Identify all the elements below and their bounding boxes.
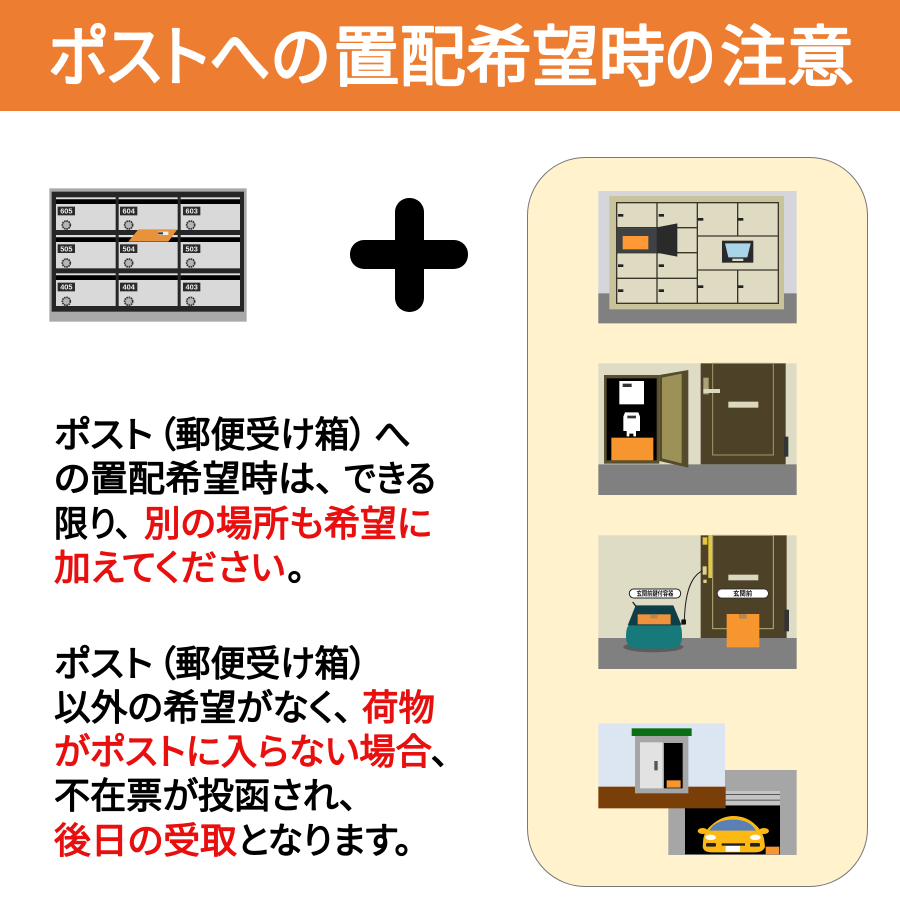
text block: no other location warning — [54, 643, 449, 861]
text block: no other location warning: となります。 — [237, 820, 412, 861]
text block: no other location warning: 後日の受取 — [54, 820, 237, 861]
icon: mailbox illustration: 503 — [186, 244, 198, 253]
text block: request other locations: 別の場所も希望に — [144, 503, 432, 544]
icon: plus sign — [350, 198, 468, 312]
icon: meter cabinet and garage — [598, 723, 797, 855]
panel: alternative delivery locations — [528, 158, 868, 886]
icon: mailbox illustration: 605 — [60, 207, 72, 216]
text block: no other location warning: 荷物 — [362, 687, 435, 728]
text block: request other locations: 。 — [287, 547, 305, 588]
text block: no other location warning: 、 — [431, 731, 449, 772]
text block: no other location warning: 不在票が投函され、 — [54, 775, 357, 816]
text block: request other locations: （郵便受け箱） — [158, 414, 367, 455]
label: door front tag — [717, 589, 768, 598]
label: door front tag: 玄関前 — [733, 589, 753, 598]
icon: mailbox illustration — [49, 188, 247, 322]
title: の — [665, 20, 715, 94]
icon: gas meter box at door — [598, 363, 797, 495]
text block: no other location warning: がポストに入らない場合 — [54, 731, 432, 772]
text block: request other locations: 加えてください — [54, 547, 285, 588]
title: 置配希望時 — [333, 20, 665, 94]
text block: request other locations: ポスト — [54, 414, 153, 455]
icon: mailbox illustration: 403 — [186, 283, 198, 292]
icon: delivery locker — [598, 191, 797, 323]
icon: mailbox illustration: 505 — [60, 244, 72, 253]
text block: no other location warning: （郵便受け箱） — [158, 643, 367, 684]
text block: request other locations: の置配希望時は、 — [54, 458, 334, 499]
text block: request other locations: できる — [344, 458, 436, 499]
text block: no other location warning: ポスト — [54, 643, 153, 684]
label: locked container tag — [629, 589, 681, 598]
title banner — [0, 0, 900, 111]
icon: mailbox illustration: 504 — [123, 244, 136, 253]
icon: mailbox illustration: 603 — [186, 207, 198, 216]
icon: mailbox illustration: 405 — [60, 283, 72, 292]
title: 注意 — [720, 20, 854, 94]
icon: locked bag at door — [598, 535, 797, 669]
label: locked container tag: 玄関前鍵付容器 — [637, 589, 674, 598]
text block: request other locations: 限り、 — [54, 503, 132, 544]
icon: mailbox illustration: 604 — [123, 207, 136, 216]
text block: request other locations — [54, 414, 436, 588]
icon: mailbox illustration: 404 — [123, 283, 136, 292]
text block: no other location warning: 以外の希望がなく、 — [54, 687, 352, 728]
title — [48, 20, 854, 94]
text block: request other locations: へ — [374, 414, 411, 455]
title: ポストへの — [48, 20, 330, 94]
